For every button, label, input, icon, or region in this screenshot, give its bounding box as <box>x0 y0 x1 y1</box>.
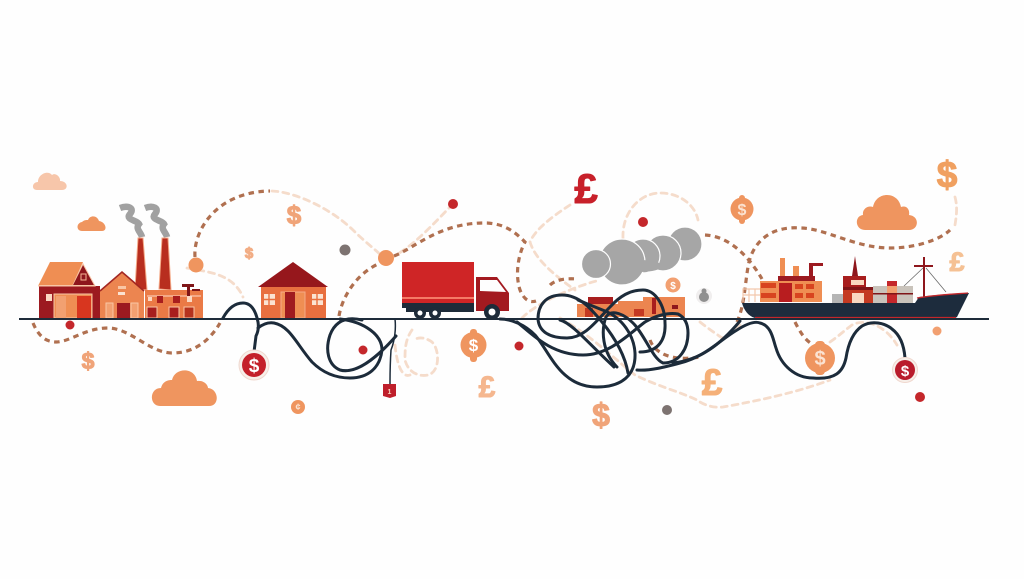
hull trim <box>755 293 968 318</box>
coin: orange dollar top right <box>730 195 754 224</box>
ship railing <box>743 289 760 302</box>
tag hanging from cable: 1 <box>388 389 392 396</box>
coin: red dollar right <box>892 358 918 382</box>
factory cluster <box>38 238 203 318</box>
brown dashed routes <box>33 191 950 358</box>
dollar: small: $ <box>245 245 254 262</box>
factory building <box>145 284 203 318</box>
pound: lower right: £ <box>702 362 723 403</box>
pound: red large: £ <box>574 165 598 212</box>
pale dashed routes <box>187 191 957 407</box>
engine block <box>760 258 823 302</box>
delivery truck <box>402 262 509 320</box>
hull <box>742 293 969 318</box>
currency symbols <box>82 154 965 433</box>
small grey money bag <box>696 288 712 304</box>
ground line <box>19 318 989 320</box>
cloud: top right <box>857 195 917 230</box>
dollar: top right: $ <box>937 154 958 195</box>
tangled cable <box>223 290 905 387</box>
coin: red dollar right: $ <box>901 363 910 380</box>
coin: small dollar near warehouse <box>666 278 680 292</box>
warehouse behind the knot <box>577 297 685 317</box>
coin: small cent <box>291 400 305 414</box>
house <box>258 262 328 318</box>
dollar: upper left: $ <box>287 200 302 230</box>
cloud: pale top left <box>33 173 67 190</box>
small house <box>100 272 144 318</box>
tag hanging from cable <box>383 384 396 398</box>
dollar: lower left: $ <box>82 348 95 374</box>
coin: orange dollar centre <box>460 329 486 362</box>
smoke: left chimney <box>120 207 142 237</box>
coin: small cent: ¢ <box>295 402 301 412</box>
cargo ship <box>742 256 969 318</box>
mast and rigging <box>904 257 946 298</box>
coin: orange dollar top right: $ <box>738 202 747 219</box>
barn <box>38 262 100 318</box>
dollar: lower centre: $ <box>592 397 610 433</box>
containers <box>873 281 913 303</box>
coin: orange dollar centre: $ <box>469 336 479 355</box>
coin: orange dollar on cable right: $ <box>814 348 826 370</box>
grey smoke cloud <box>582 227 702 285</box>
smoke: right chimney <box>145 207 167 237</box>
pound: right: £ <box>949 247 965 277</box>
chimneys <box>135 238 171 290</box>
coin: red dollar on cable <box>239 350 269 380</box>
coin: orange dollar on cable right <box>805 341 835 375</box>
coin: red dollar on cable: $ <box>249 356 260 377</box>
cloud: large bottom left <box>152 370 217 406</box>
scattered dots <box>66 199 942 415</box>
pound: lower centre: £ <box>479 371 496 404</box>
cloud: small left <box>78 216 106 231</box>
bridge tower <box>832 256 873 303</box>
coin: small dollar near warehouse: $ <box>670 281 676 292</box>
